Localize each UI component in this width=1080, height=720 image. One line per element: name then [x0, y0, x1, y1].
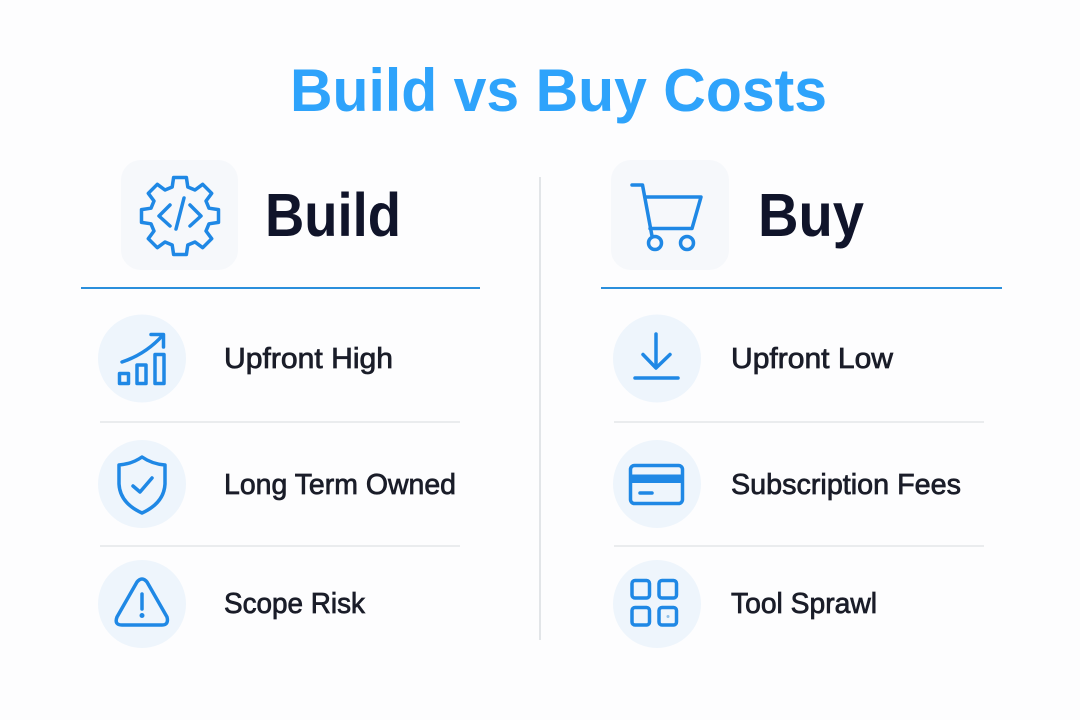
buy header icon: shopping cart: [611, 160, 729, 270]
row: upfront low: Upfront Low: [731, 343, 894, 375]
icon: download arrow: [613, 314, 701, 402]
row: upfront low: [613, 314, 894, 402]
build header icon: gear with code: [121, 160, 238, 270]
row: upfront high: [98, 314, 393, 402]
row: subscription fees: [613, 440, 961, 528]
row: subscription fees: Subscription Fees: [731, 469, 961, 501]
row: scope risk: [98, 560, 365, 648]
row: tool sprawl: [613, 560, 877, 648]
icon: app grid: [613, 560, 701, 648]
icon: warning triangle: [98, 560, 186, 648]
row: scope risk: Scope Risk: [224, 588, 365, 620]
title: Build vs Buy Costs: [290, 57, 827, 124]
buy heading: Buy: [758, 181, 864, 249]
panel: build: [81, 160, 480, 648]
row: upfront high: Upfront High: [224, 343, 393, 375]
icon: shield check: [98, 440, 186, 528]
row: tool sprawl: Tool Sprawl: [731, 588, 877, 620]
panel: buy: [601, 160, 1002, 648]
row: long term owned: Long Term Owned: [224, 469, 456, 501]
icon: rising bar chart: [98, 314, 186, 402]
build heading: Build: [265, 181, 401, 249]
row: long term owned: [98, 440, 456, 528]
icon: credit card: [613, 440, 701, 528]
